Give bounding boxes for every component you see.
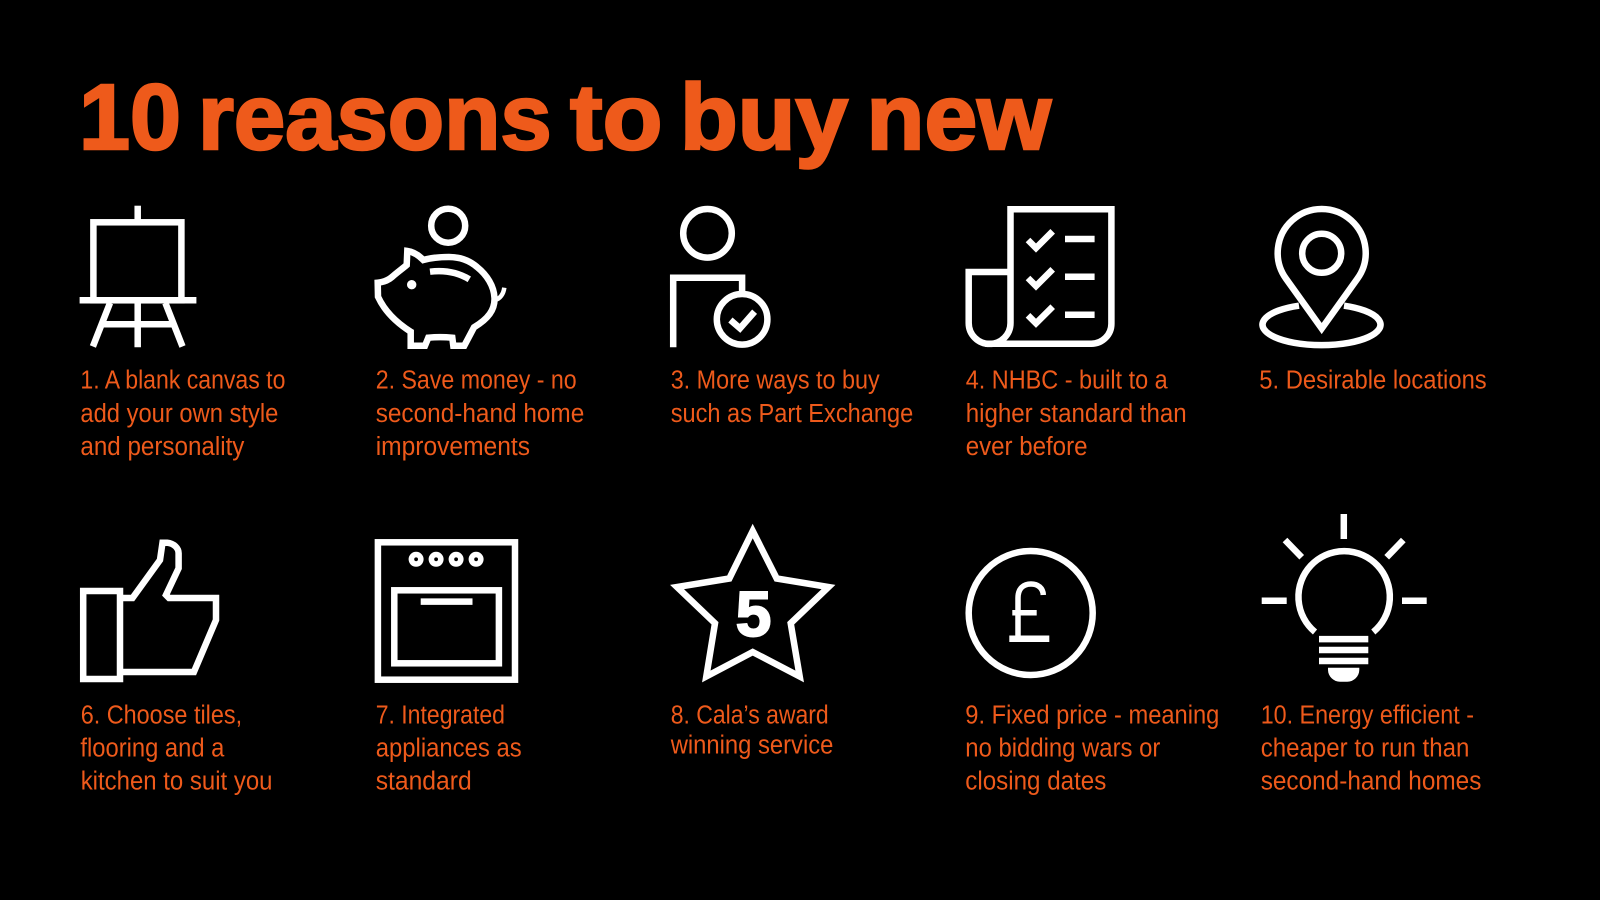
- text: reason 9: no bidding wars or: [965, 735, 1161, 763]
- panel: reason 4: [966, 209, 1187, 461]
- text: reason 5: 5. Desirable locations: [1259, 366, 1487, 394]
- title: buy: [680, 65, 848, 169]
- title: 10: [79, 65, 181, 169]
- icon: pound coin: [969, 551, 1093, 675]
- title: new: [866, 65, 1052, 169]
- title: to: [570, 65, 662, 169]
- panel: reason 6: [80, 543, 273, 795]
- panel: reason 8: [670, 531, 833, 760]
- panel: reason 2: [376, 209, 584, 461]
- panel: reason 7: [376, 542, 522, 795]
- icon: five star badge: [677, 531, 828, 676]
- text: reason 6: flooring and a: [80, 735, 225, 763]
- text: reason 4: ever before: [966, 433, 1088, 461]
- text: reason 8: winning service: [670, 732, 833, 760]
- text: reason 6: 6. Choose tiles,: [81, 701, 242, 729]
- text: reason 1: add your own style: [80, 400, 278, 428]
- text: reason 4: [966, 366, 1187, 461]
- icon: easel: [80, 206, 196, 347]
- text: reason 9: 9. Fixed price - meaning: [965, 701, 1219, 729]
- panel: reason 1: [80, 206, 285, 461]
- panel: reason 9: [965, 551, 1219, 795]
- text: reason 7: standard: [376, 767, 472, 795]
- text: reason 1: [80, 366, 285, 461]
- text: reason 4: 4. NHBC - built to a: [966, 366, 1168, 394]
- text: reason 1: 1. A blank canvas to: [80, 366, 285, 394]
- text: reason 3: [671, 366, 913, 428]
- text: reason 3: 3. More ways to buy: [671, 366, 880, 394]
- text: reason 10: second-hand homes: [1261, 767, 1481, 795]
- panel: reason 5: [1259, 209, 1487, 394]
- icon: person with check badge: [673, 209, 767, 347]
- text: reason 1: and personality: [80, 433, 245, 461]
- text: reason 8: [670, 701, 833, 760]
- text: reason 10: 10. Energy efficient -: [1261, 701, 1474, 729]
- icon: five star badge: 5: [736, 578, 771, 650]
- text: reason 10: [1261, 701, 1481, 795]
- text: reason 7: [376, 701, 522, 795]
- icon: oven: [378, 542, 515, 680]
- text: reason 9: [965, 701, 1219, 795]
- panel: reason 10: [1261, 514, 1481, 795]
- text: reason 6: kitchen to suit you: [81, 767, 272, 795]
- text: reason 2: [376, 366, 584, 461]
- text: reason 10: cheaper to run than: [1261, 735, 1469, 763]
- icon: piggy bank with coin: [378, 209, 504, 346]
- icon: light bulb: [1262, 514, 1427, 682]
- text: reason 3: such as Part Exchange: [671, 400, 913, 428]
- text: reason 2: second-hand home: [376, 400, 584, 428]
- icon: location pin: [1262, 209, 1380, 345]
- panel: reason 3: [671, 209, 913, 428]
- text: reason 2: 2. Save money - no: [376, 366, 577, 394]
- icon: checklist document: [969, 209, 1111, 344]
- title: [79, 65, 1052, 169]
- text: reason 6: [80, 701, 273, 795]
- text: reason 7: appliances as: [376, 735, 522, 763]
- title: reasons: [198, 65, 552, 169]
- text: reason 4: higher standard than: [966, 400, 1187, 428]
- text: reason 7: 7. Integrated: [376, 701, 505, 729]
- text: reason 8: 8. Cala’s award: [671, 701, 829, 729]
- text: reason 2: improvements: [376, 433, 530, 461]
- text: reason 9: closing dates: [965, 767, 1106, 795]
- icon: thumbs up: [83, 543, 216, 679]
